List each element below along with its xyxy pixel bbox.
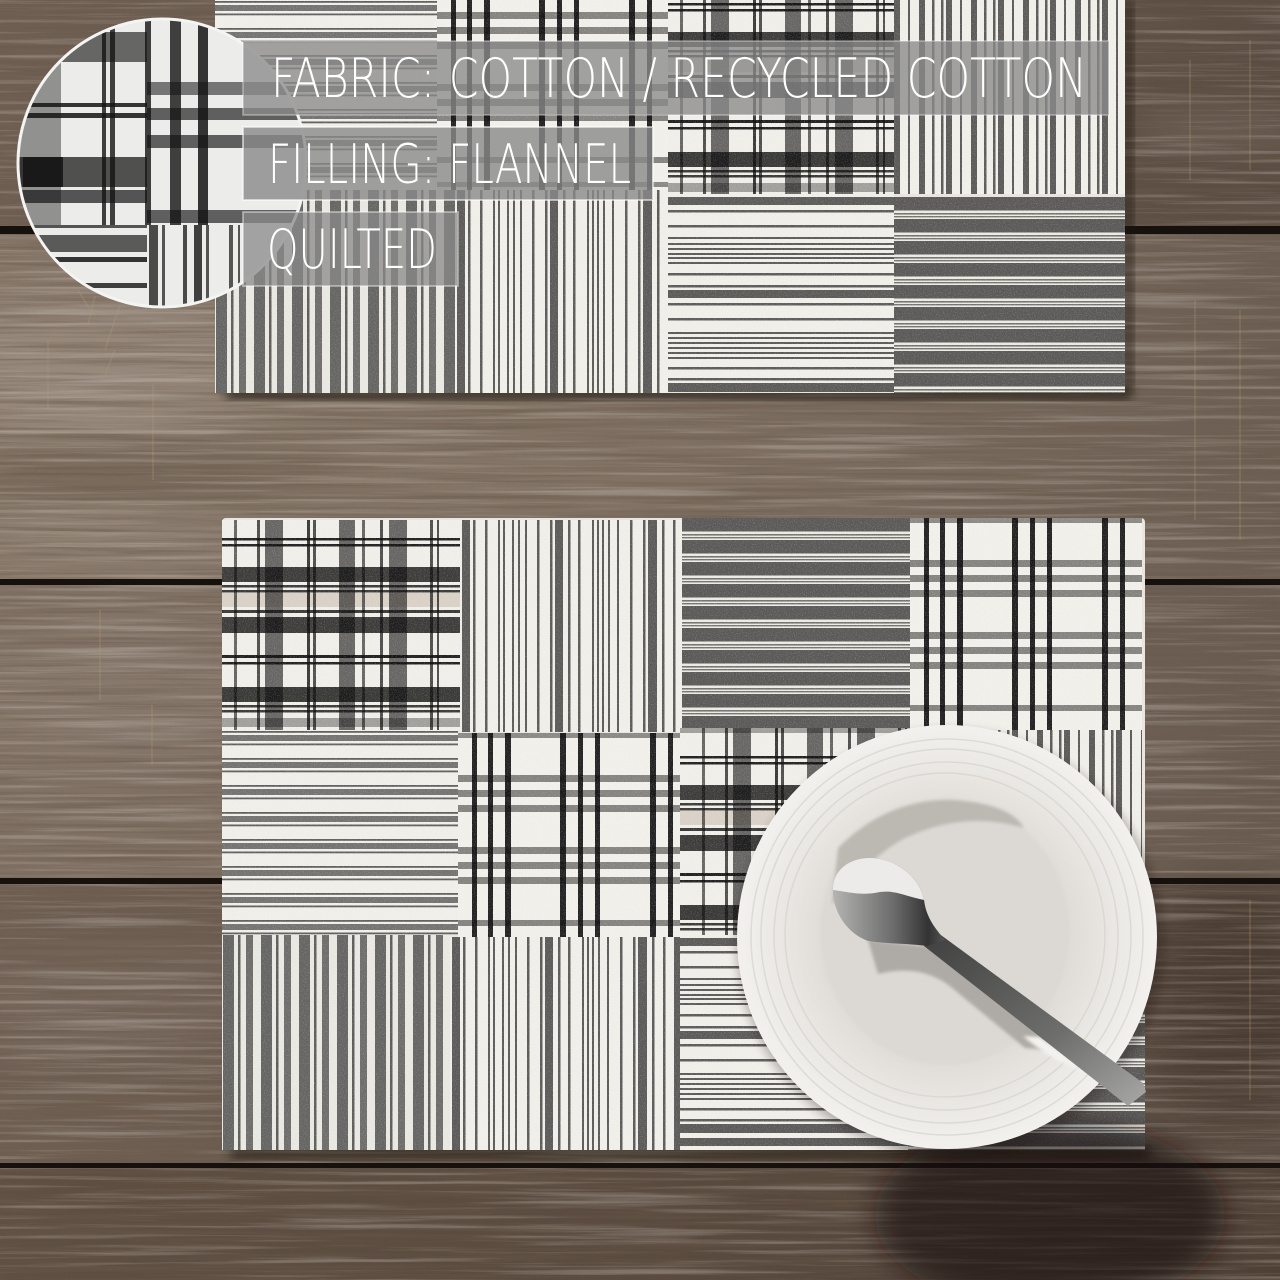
- patch: heavy plaid centre: [680, 728, 910, 935]
- spoon reflection: [1023, 1036, 1085, 1072]
- inset: stripes swatch bottom left: [34, 225, 147, 288]
- patch: horizontal stripes: [215, 0, 437, 190]
- label: filling: [243, 127, 653, 200]
- spoon: [833, 858, 1146, 1106]
- patch: window-pane plaid centre: [458, 733, 680, 937]
- inset ring: [18, 19, 306, 307]
- patch: window-pane plaid: [437, 0, 668, 190]
- patch: vertical stripes: [894, 0, 1125, 194]
- plate well: [820, 799, 1070, 1065]
- label: fabric: FABRIC: COTTON / RECYCLED COTTON: [271, 47, 1087, 110]
- patch: heavy plaid: [668, 0, 894, 209]
- magnified fabric inset: [18, 18, 308, 310]
- label: filling: FILLING: FLANNEL: [268, 133, 631, 196]
- plate cast shadow: [737, 730, 1225, 1280]
- spoon shadow: [868, 940, 1050, 1050]
- top placemat: [215, 0, 1134, 400]
- patch: grey horizontal stripes: [682, 518, 910, 728]
- spoon handle: [924, 930, 1146, 1106]
- patch: horizontal stripes: [222, 730, 458, 935]
- inset: stripes swatch bottom right: [149, 225, 240, 310]
- patch: white vertical stripes: [460, 520, 682, 732]
- patch: thin horizontal stripes: [668, 194, 894, 392]
- patch: white vertical stripes bottom: [450, 937, 680, 1150]
- patch: grey horizontal stripes: [894, 197, 1125, 393]
- patch: thin horizontal stripes bottom: [680, 935, 908, 1150]
- inset: plaid swatch right: [145, 18, 307, 225]
- spoon bowl highlight: [833, 858, 924, 900]
- label: quilted: QUILTED: [267, 218, 437, 281]
- wood scratches: [48, 40, 1250, 1100]
- well crescent shadow: [832, 800, 1024, 905]
- patch: window-pane plaid: [910, 518, 1142, 730]
- patch: vertical stripes right: [908, 730, 1142, 935]
- patch: grey vertical stripes bottom: [222, 935, 450, 1150]
- spoon bowl: [833, 858, 945, 946]
- patch: grey horizontal stripes bottom: [908, 935, 1145, 1150]
- patch: white vertical stripes: [455, 190, 668, 393]
- bottom placemat: [222, 518, 1150, 1160]
- inset: heavy plaid swatch: [19, 18, 147, 225]
- white plate: [737, 725, 1157, 1149]
- label: quilted: [243, 212, 458, 286]
- patch: grey vertical stripes: [215, 190, 455, 393]
- patch: heavy plaid: [222, 520, 460, 730]
- plank gaps: [0, 226, 1280, 1168]
